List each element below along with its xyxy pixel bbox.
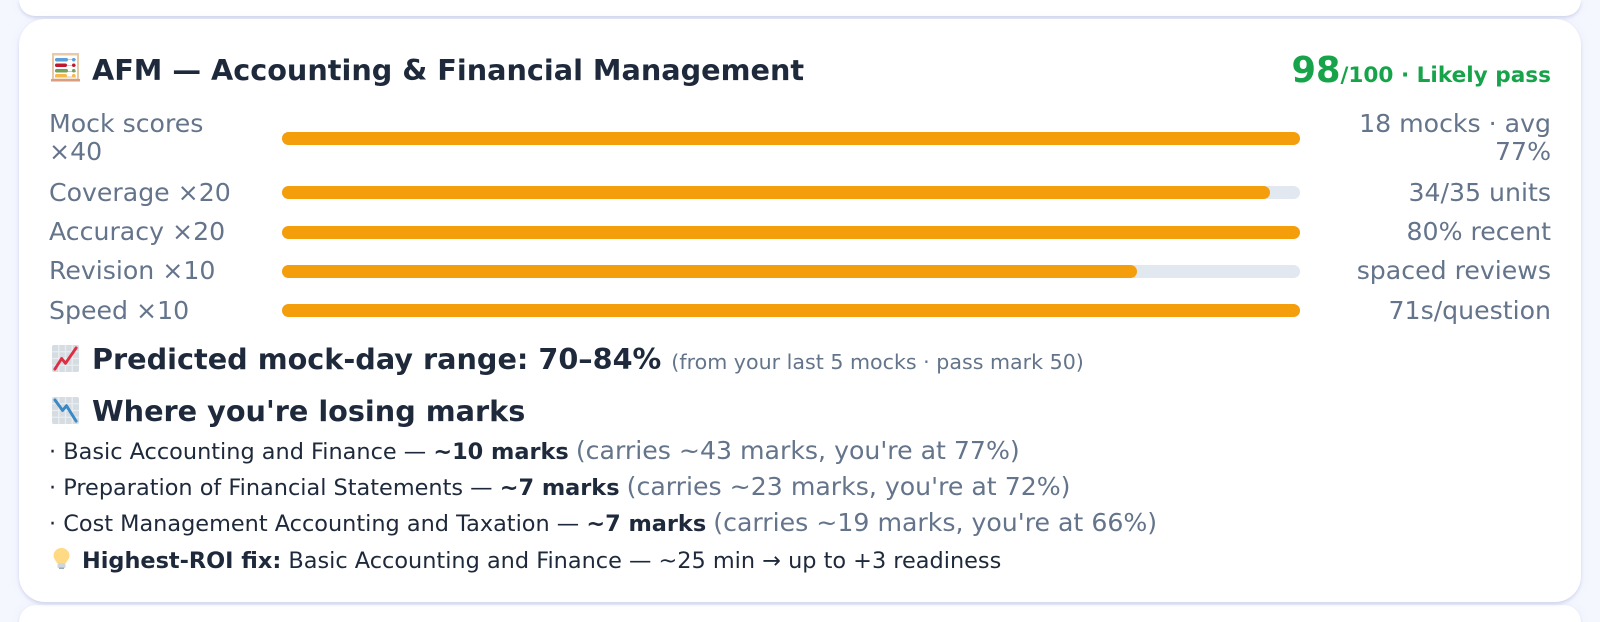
- bar: mock scores: [282, 132, 1300, 145]
- value: accuracy: 80% recent: [1407, 217, 1551, 246]
- loss item 1: · Basic Accounting and Finance — ~10 marks (carries ~43 marks, you're at 77%): [49, 436, 1020, 465]
- label: coverage: Coverage ×20: [49, 178, 231, 207]
- value: mock scores: [1359, 109, 1551, 166]
- panel: previous card edge: [19, 0, 1581, 16]
- label: mock scores: [49, 109, 203, 166]
- icon: light bulb: [54, 548, 70, 569]
- value: mock scores: 77%: [1495, 137, 1551, 166]
- bar: accuracy: [282, 226, 1300, 239]
- value: mock scores: 18 mocks · avg: [1359, 109, 1551, 138]
- label: revision: Revision ×10: [49, 256, 215, 285]
- bar: speed: [282, 304, 1300, 317]
- panel: next card edge: [19, 605, 1581, 622]
- label: mock scores: ×40: [49, 137, 102, 166]
- loss item 2: · Preparation of Financial Statements — ~7 marks (carries ~23 marks, you're at 72%): [49, 472, 1070, 501]
- loss item 3: · Cost Management Accounting and Taxation — ~7 marks (carries ~19 marks, you're at 66%): [49, 508, 1157, 537]
- heading: losing marks: Where you're losing marks: [92, 394, 525, 428]
- predicted range: Predicted mock-day range: 70–84% (from your last 5 mocks · pass mark 50): [92, 342, 1084, 376]
- value: coverage: 34/35 units: [1408, 178, 1551, 207]
- bar: revision: [282, 265, 1300, 278]
- bar: coverage: [282, 186, 1300, 199]
- icon: chart down: [52, 397, 79, 424]
- icon: abacus: [51, 53, 80, 82]
- score: 98/100 · Likely pass: [1292, 50, 1551, 91]
- highest ROI fix: Highest-ROI fix: Basic Accounting and Finance — ~25 min → up to +3 readiness: [82, 548, 1001, 574]
- icon: chart up: [52, 345, 79, 372]
- title: AFM — Accounting & Financial Management: [92, 53, 804, 87]
- value: revision: spaced reviews: [1357, 256, 1551, 285]
- label: speed: Speed ×10: [49, 296, 189, 325]
- label: accuracy: Accuracy ×20: [49, 217, 225, 246]
- label: mock scores: Mock scores: [49, 109, 203, 138]
- value: speed: 71s/question: [1389, 296, 1551, 325]
